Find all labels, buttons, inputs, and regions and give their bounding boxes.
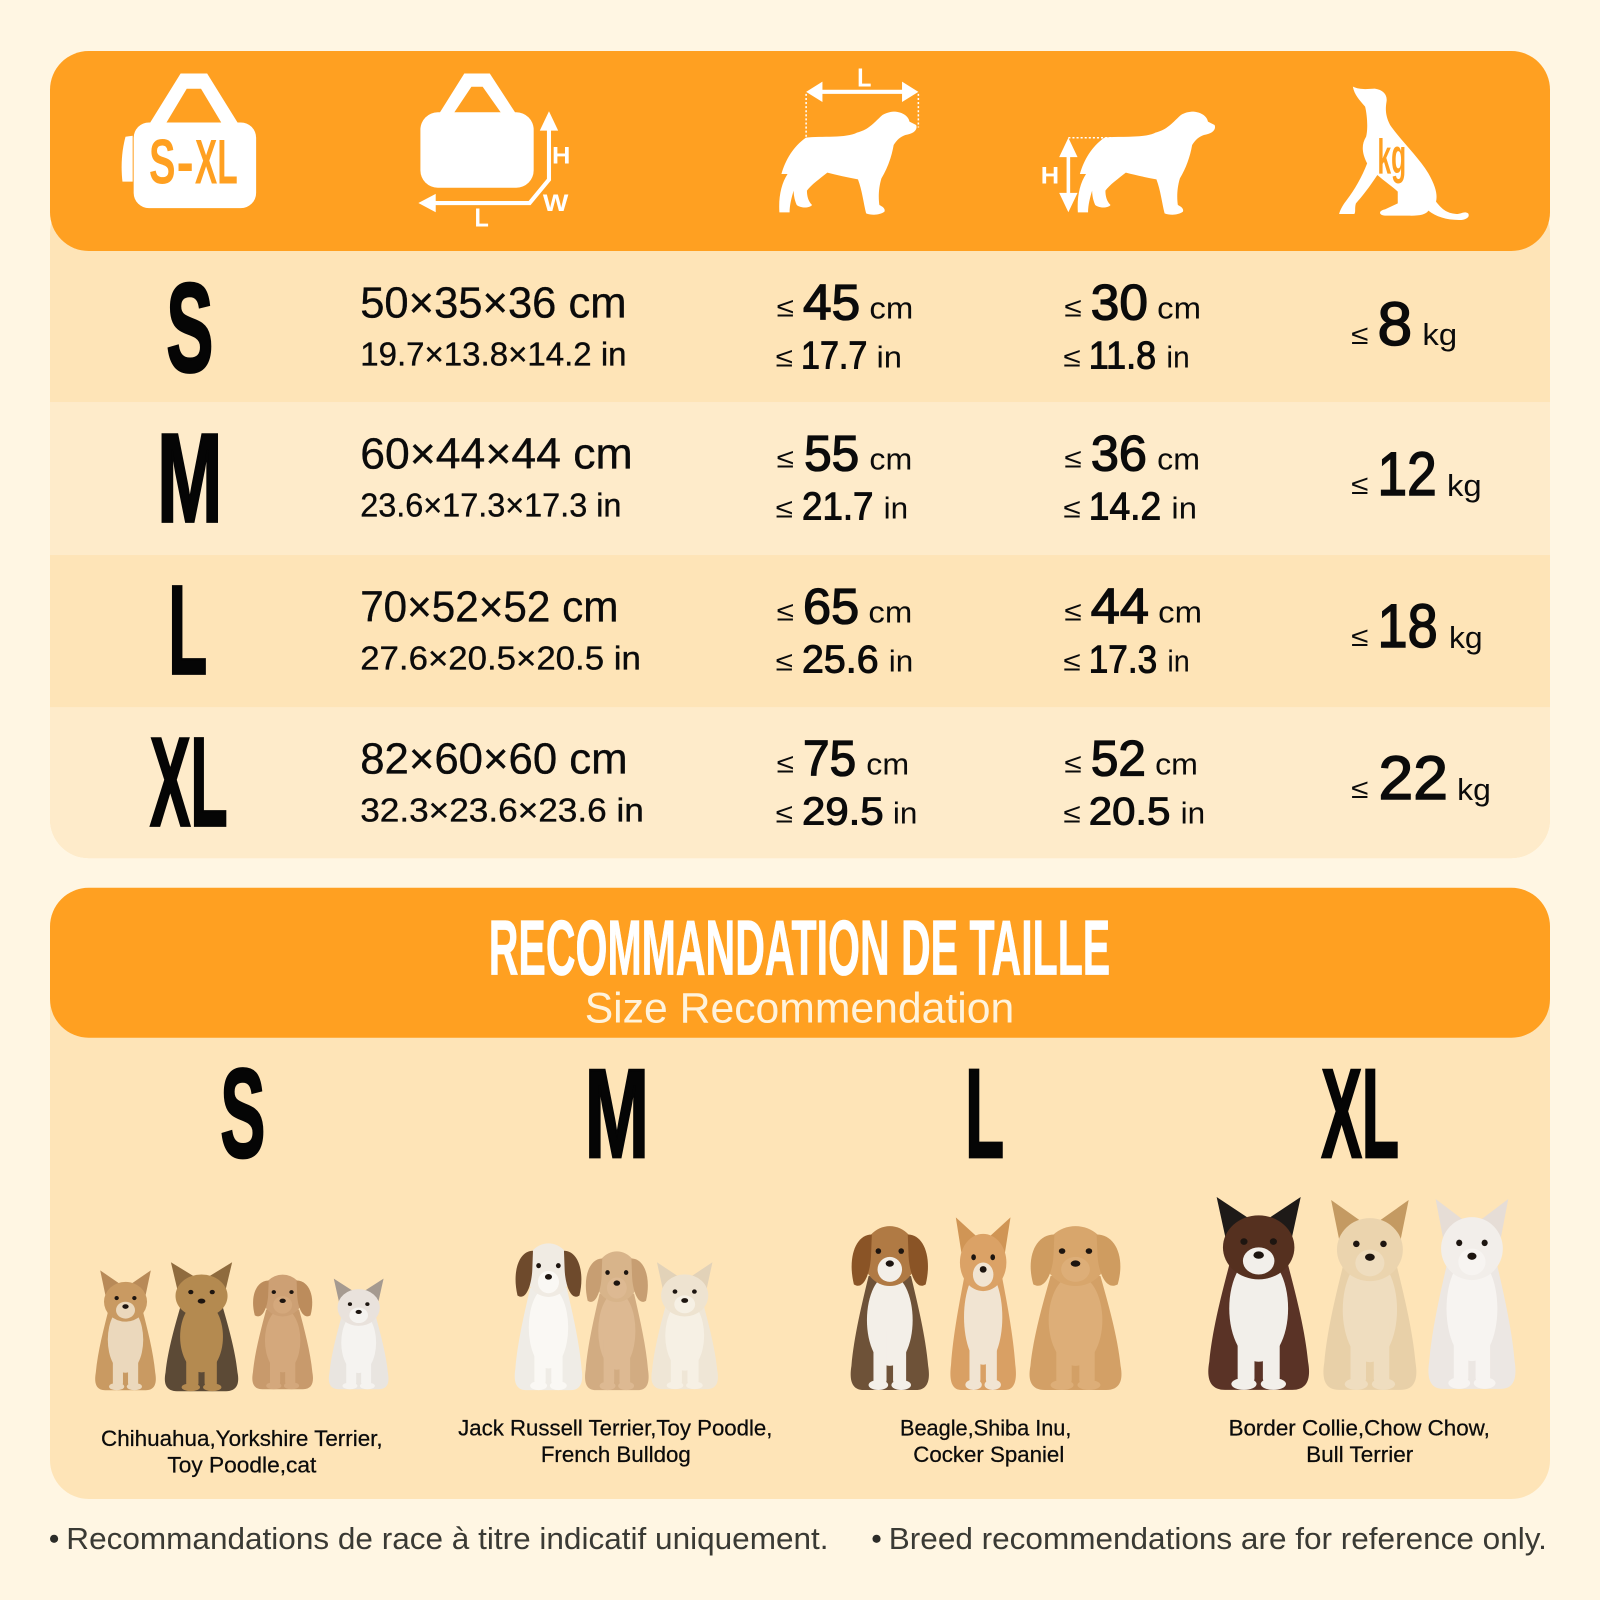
icon: dog height: [1041, 112, 1215, 215]
row: size S: ≤: [776, 341, 793, 372]
breeds caption L: [900, 1416, 1071, 1467]
row: size XL: ≤: [1351, 773, 1368, 804]
icon: bag with S-XL: [122, 73, 256, 208]
row: size S: ≤: [1351, 319, 1368, 350]
row: size L: 25.6: [802, 638, 879, 681]
row: size S: 45: [803, 274, 860, 330]
panel: size recommendation: [50, 888, 1550, 1499]
row: size M: ≤: [1351, 469, 1368, 500]
row: size L: 44: [1091, 578, 1149, 634]
row: size L: L: [168, 558, 207, 700]
row: size L: ≤: [777, 595, 794, 626]
breeds caption XL: Border Collie,Chow Chow,: [1229, 1416, 1490, 1441]
row: size S: 17.7: [801, 334, 867, 377]
row: size M: 36: [1091, 425, 1147, 481]
row: size XL: XL: [150, 711, 228, 853]
table header band: [50, 51, 1550, 251]
dog: shiba inu: [950, 1217, 1016, 1390]
dog: border collie: [1208, 1197, 1309, 1390]
dog: bull terrier: [1428, 1199, 1515, 1389]
row: size M: [157, 406, 1482, 548]
dog: jack russell terrier: [515, 1243, 582, 1390]
panel: size table: [50, 51, 1550, 858]
row: size S: in: [877, 340, 902, 374]
row: size XL: 32.3×23.6×23.6 in: [360, 792, 644, 829]
row: size L: 18: [1378, 592, 1438, 660]
row: size L: [168, 558, 1483, 700]
row: size S: 11.8: [1089, 334, 1156, 377]
footnote English: Breed recommendations are for reference only.: [889, 1522, 1547, 1556]
row: size L: in: [1167, 644, 1190, 678]
row: size L: ≤: [1064, 595, 1082, 626]
row: size XL: [150, 711, 1491, 853]
dog: beagle: [851, 1226, 929, 1390]
icon: dog height: H: [1041, 163, 1059, 190]
row: size S: [166, 256, 1457, 398]
icon: bag dimensions: H: [552, 142, 570, 169]
dog: chihuahua: [95, 1270, 156, 1390]
row: size L: kg: [1449, 621, 1483, 655]
row: size S: 8: [1378, 290, 1412, 358]
row: size M: 12: [1378, 440, 1437, 508]
column L: breeds: L: [965, 1042, 1004, 1184]
row: size S: cm: [1157, 291, 1201, 325]
row: size M: 60×44×44 cm: [360, 429, 633, 478]
row: size L: 70×52×52 cm: [360, 582, 618, 631]
breeds caption XL: Bull Terrier: [1306, 1442, 1414, 1467]
row: size L: ≤: [776, 645, 793, 676]
row: size M: 23.6×17.3×17.3 in: [360, 487, 621, 524]
row: size XL: ≤: [776, 797, 793, 828]
row: size L: 27.6×20.5×20.5 in: [360, 640, 641, 677]
icon: bag dimensions: W: [543, 190, 569, 217]
column S: breeds: [95, 1042, 389, 1477]
row: size M: 55: [804, 425, 859, 481]
row: size S: ≤: [777, 291, 794, 322]
dog: french bulldog: [651, 1262, 718, 1389]
row: size S: ≤: [1064, 291, 1082, 322]
breeds caption M: French Bulldog: [541, 1442, 691, 1467]
icon: dog body length: L: [857, 65, 871, 93]
row: size M: cm: [1157, 442, 1200, 476]
breeds caption L: Beagle,Shiba Inu,: [900, 1416, 1071, 1441]
row: size XL: 22: [1379, 744, 1448, 812]
row: size M: in: [1171, 491, 1197, 525]
row: size XL: 75: [803, 731, 856, 787]
row: size XL: cm: [866, 747, 909, 781]
row: size S: ≤: [1063, 341, 1081, 372]
breeds caption M: Jack Russell Terrier,Toy Poodle,: [458, 1416, 772, 1441]
row: size XL: 29.5: [802, 790, 884, 833]
breeds caption M: [458, 1416, 772, 1467]
icon: sitting dog weight: kg: [1378, 130, 1406, 184]
row: size M: cm: [869, 442, 912, 476]
breeds caption S: [101, 1426, 383, 1477]
icon: bag dimensions: L: [474, 205, 489, 233]
icon: bag with S-XL: XL: [195, 128, 238, 198]
column S: breeds: S: [220, 1042, 265, 1184]
row: size XL: kg: [1457, 773, 1491, 807]
row: size S: S: [166, 256, 213, 398]
row: size XL: ≤: [1064, 747, 1082, 778]
row: size L: 65: [803, 578, 859, 634]
breeds caption S: Chihuahua,Yorkshire Terrier,: [101, 1426, 383, 1451]
row: size M: ≤: [776, 492, 793, 523]
icon: bag with S-XL: S: [149, 128, 176, 198]
column L: breeds: [851, 1042, 1121, 1467]
row: size M: ≤: [1063, 492, 1081, 523]
row: size M: ≤: [1064, 442, 1082, 473]
recommendation heading band: [50, 888, 1550, 1038]
column M: breeds: [458, 1042, 772, 1467]
row: size M: in: [884, 491, 908, 525]
column M: breeds: M: [585, 1042, 649, 1184]
column XL: breeds: XL: [1321, 1042, 1399, 1184]
icon: bag with S-XL: -: [177, 128, 194, 198]
icon: bag dimensions: [418, 73, 570, 233]
row: size XL: in: [1181, 796, 1205, 830]
breeds caption S: Toy Poodle,cat: [167, 1452, 317, 1477]
row: size L: ≤: [1351, 621, 1368, 652]
row: size XL: ≤: [777, 747, 794, 778]
row: size XL: 20.5: [1089, 790, 1170, 833]
breeds caption L: Cocker Spaniel: [913, 1442, 1064, 1467]
row: size L: 17.3: [1089, 638, 1157, 681]
icon: dog body length: [779, 65, 918, 215]
row: size S: cm: [869, 291, 913, 325]
icon: sitting dog weight: [1339, 87, 1469, 220]
row: size XL: 82×60×60 cm: [360, 734, 628, 783]
row: size M: kg: [1447, 469, 1482, 503]
row: size S: kg: [1422, 318, 1457, 352]
row: size XL: 52: [1091, 731, 1146, 787]
row: size M: ≤: [777, 442, 794, 473]
column XL: breeds: [1208, 1042, 1515, 1467]
dog: yorkshire terrier: [165, 1262, 238, 1391]
row: size M: 14.2: [1089, 485, 1161, 528]
dog: chow chow: [1323, 1200, 1416, 1390]
footnote French: Recommandations de race à titre indicatif uniquement.: [66, 1522, 829, 1556]
row: size M: 21.7: [802, 485, 873, 528]
row: size L: cm: [1158, 595, 1202, 629]
row: size XL: ≤: [1063, 797, 1081, 828]
recommendation heading band: Size Recommendation: [585, 984, 1014, 1032]
row: size S: 50×35×36 cm: [360, 278, 627, 327]
dog: cat: [329, 1279, 389, 1389]
dog: toy poodle: [252, 1275, 313, 1389]
row: size S: in: [1166, 340, 1190, 374]
row: size XL: cm: [1155, 747, 1198, 781]
row: size S: 19.7×13.8×14.2 in: [360, 336, 627, 373]
row: size S: 30: [1091, 274, 1148, 330]
breeds caption XL: [1229, 1416, 1490, 1467]
row: size M: M: [157, 406, 222, 548]
row: size L: in: [889, 644, 913, 678]
dog: toy poodle: [585, 1251, 649, 1390]
row: size L: cm: [868, 595, 912, 629]
row: size XL: in: [893, 796, 917, 830]
dog: cocker spaniel: [1030, 1226, 1121, 1390]
row: size L: ≤: [1063, 645, 1081, 676]
